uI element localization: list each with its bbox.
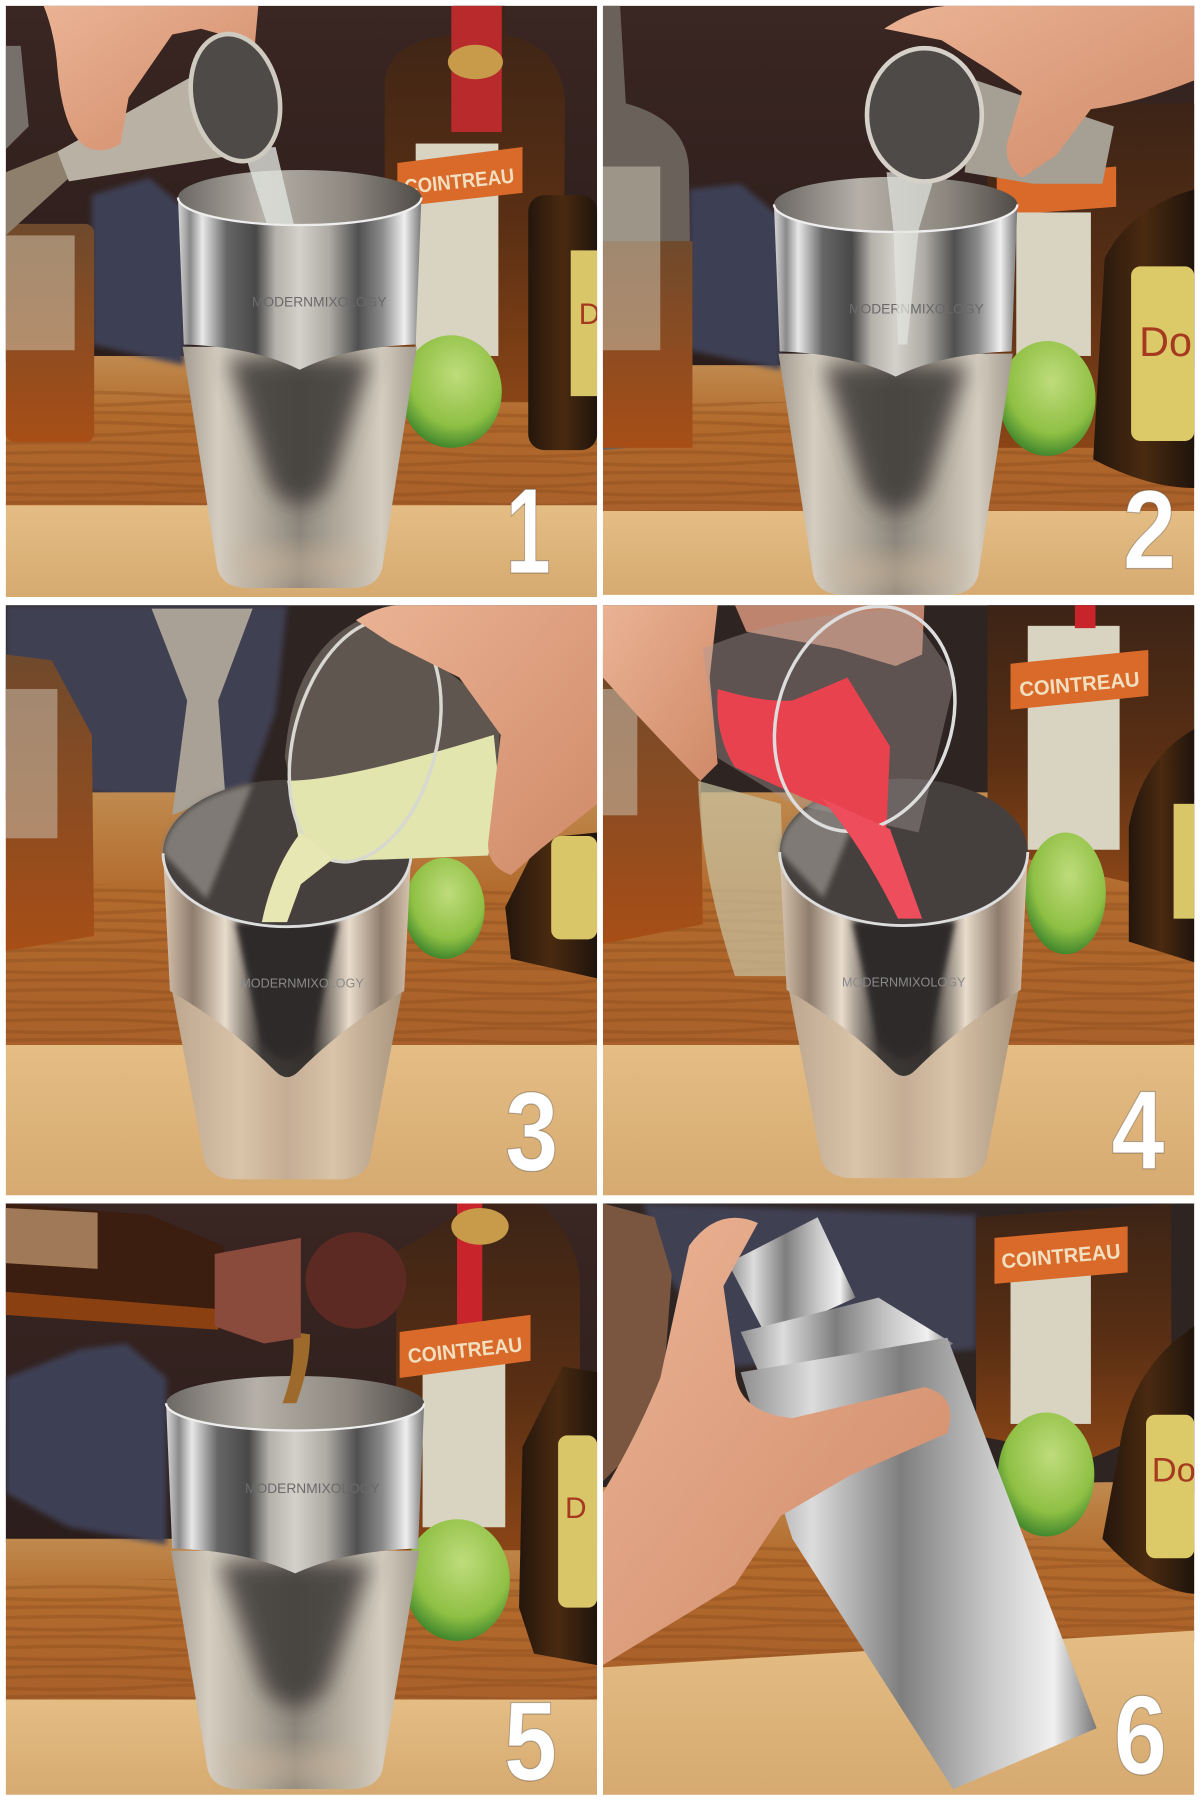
background scene 5: D	[565, 1492, 587, 1525]
icon: lime 1	[401, 335, 502, 448]
pour stream 1	[243, 147, 294, 225]
nectar stream	[282, 1332, 310, 1403]
shaker 2	[774, 177, 1017, 595]
step number 2: 2	[1123, 467, 1176, 593]
shaker 1	[178, 170, 421, 588]
hand 2	[884, 6, 1194, 178]
panel 2: pouring liqueur	[603, 6, 1200, 597]
shaker 2: MODERNMIXOLOGY	[849, 301, 984, 316]
red juice stream	[821, 798, 922, 919]
hand 3	[356, 605, 597, 875]
step number 1: 1	[506, 464, 551, 599]
icon: lime 4	[1025, 833, 1106, 954]
jigger body 1	[6, 75, 235, 235]
background scene 6: COINTREAU	[1001, 1240, 1122, 1273]
panel 1: pouring tequila	[6, 6, 600, 599]
shaker 5	[166, 1376, 424, 1789]
hand 4	[603, 605, 924, 781]
background scene 6	[603, 1203, 1196, 1795]
glass of red juice	[703, 605, 957, 833]
icon: lime 3	[404, 858, 485, 959]
hand 6	[603, 1218, 950, 1665]
background scene 5	[6, 1203, 597, 1795]
background scene 4: COINTREAU	[1018, 668, 1141, 702]
jigger mouth 1	[188, 32, 282, 164]
panel 4: pouring watermelon juice	[603, 583, 1194, 1195]
icon: lime 2	[999, 341, 1096, 456]
pour stream 2	[887, 172, 936, 344]
panel 5: pouring agave nectar	[6, 1203, 597, 1800]
jigger 2	[867, 48, 1114, 184]
cocktail shaker	[728, 1217, 1097, 1789]
step number 3: 3	[505, 1069, 558, 1195]
icon: lime 6	[998, 1412, 1094, 1536]
hand 1	[44, 6, 258, 150]
shaker 4	[780, 779, 1028, 1178]
step number 4: 4	[1111, 1068, 1165, 1194]
background scene 1: D	[579, 298, 600, 331]
panel 6: shaking	[603, 1203, 1196, 1799]
background scene 1	[6, 6, 600, 597]
background scene 3	[6, 605, 597, 1195]
background scene 5: COINTREAU	[407, 1333, 523, 1368]
shaker 4: MODERNMIXOLOGY	[842, 975, 966, 989]
standing jigger	[152, 609, 253, 815]
step number 6: 6	[1114, 1673, 1167, 1799]
background scene 1: COINTREAU	[403, 165, 515, 199]
glass of lime juice	[284, 621, 500, 864]
background scene 2	[603, 6, 1200, 597]
panel 3: pouring lime juice	[6, 602, 597, 1195]
shaker 1: MODERNMIXOLOGY	[252, 295, 387, 310]
shaker 3	[163, 780, 411, 1179]
shaker 5: MODERNMIXOLOGY	[245, 1481, 380, 1496]
icon: lime 5	[404, 1519, 510, 1641]
agave bottle	[6, 1203, 407, 1344]
background scene 6: Do	[1152, 1451, 1196, 1489]
lime juice stream	[262, 833, 333, 922]
shaker 3: MODERNMIXOLOGY	[240, 977, 364, 991]
background scene 4	[603, 605, 1194, 1195]
